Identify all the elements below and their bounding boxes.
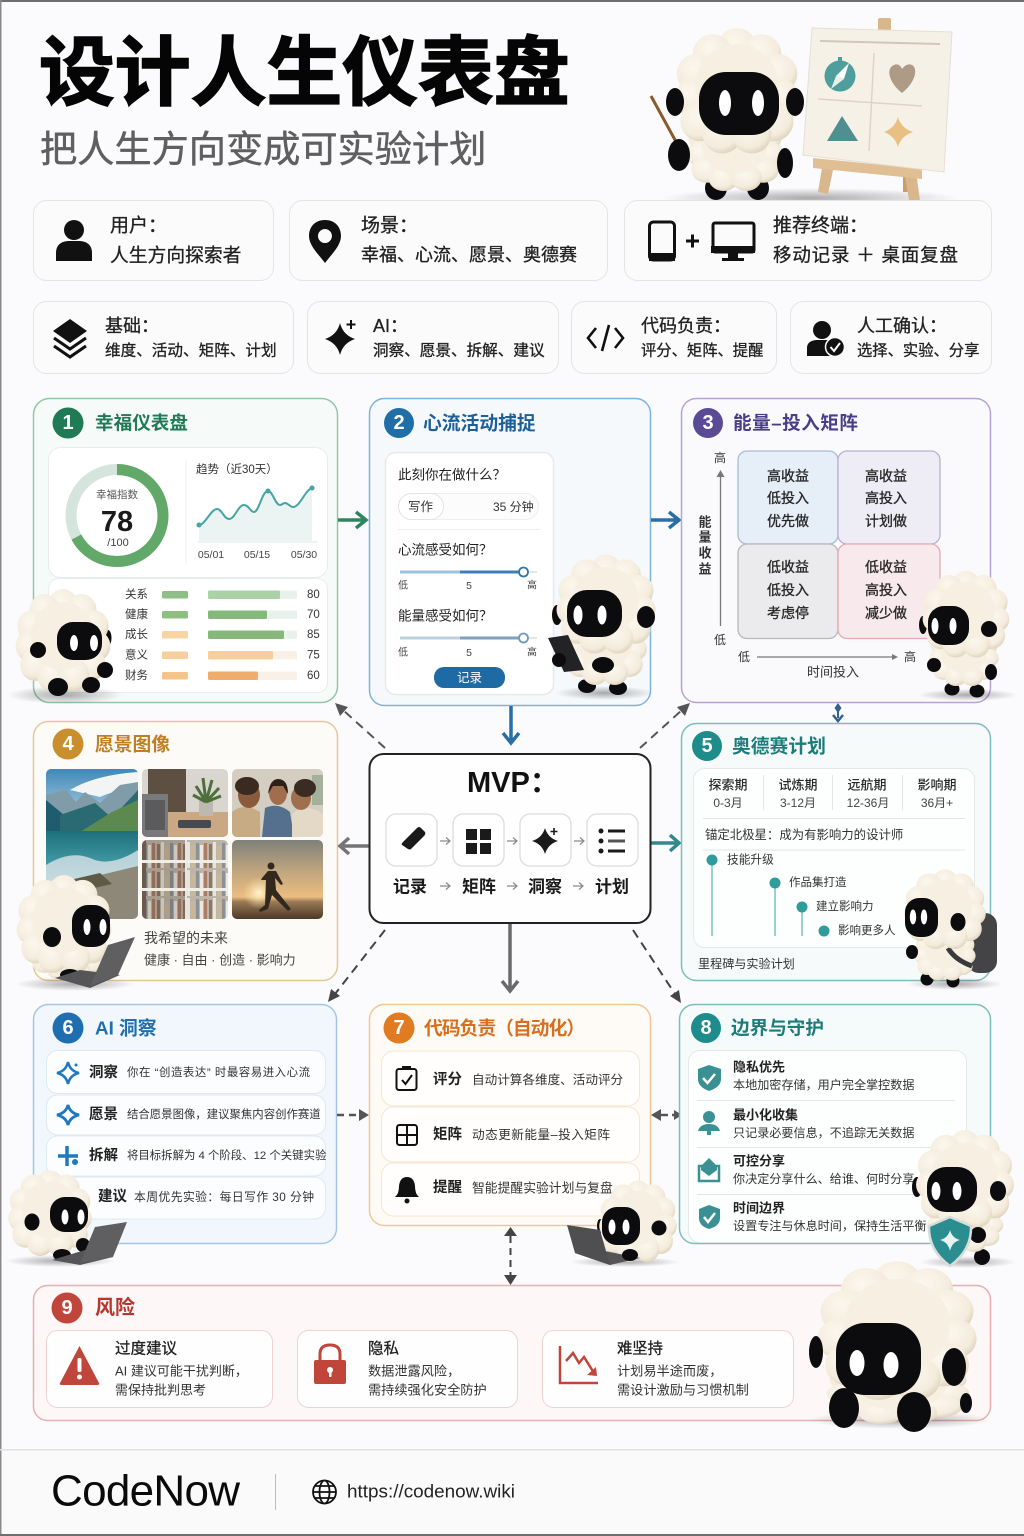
- risk: hard to persist: 计划易半途而废，: [617, 1362, 722, 1378]
- bar chart: life dimensions: 70: [307, 609, 320, 621]
- step: record: [386, 814, 437, 896]
- badge 4: [52, 728, 84, 760]
- risk: privacy: 需持续强化安全防护: [368, 1382, 487, 1398]
- heading 5: 奥德赛计划: [732, 734, 826, 756]
- badge 6: 6: [62, 1017, 74, 1039]
- photo: bookshelves: [142, 840, 228, 919]
- card: code: 评分、矩阵、提醒: [641, 342, 763, 360]
- quadrant: high gain low input: 优先做: [767, 513, 809, 529]
- icon: location pin: [309, 220, 341, 263]
- timeline caption: 里程碑与实验计划: [698, 956, 795, 971]
- logo: CodeNow: CodeNow: [51, 1466, 240, 1516]
- card: user: [34, 200, 274, 280]
- heading 2: 心流活动捕捉: [423, 412, 536, 434]
- photo: desk and plant: [142, 769, 228, 837]
- heading 3: 能量–投入矩阵: [733, 412, 858, 434]
- axes: 时间投入: [807, 664, 859, 680]
- card: user: 人生方向探索者: [110, 244, 241, 266]
- form card: 高: [527, 578, 537, 592]
- bar chart: life dimensions: 关系: [125, 587, 148, 601]
- form card: 能量感受如何？: [398, 608, 492, 624]
- quadrant: high gain high input: 高投入: [865, 490, 907, 506]
- line chart: trend: 趋势（近30天）: [196, 463, 278, 476]
- insight row: 洞察: [89, 1063, 118, 1081]
- minimal collection: 最小化收集: [733, 1108, 798, 1122]
- suggestion row: 本周优先实验：每日写作 30 分钟: [134, 1190, 314, 1204]
- form card: 写作: [408, 500, 434, 514]
- badge 3: [693, 408, 723, 438]
- privacy first: 隐私优先: [733, 1060, 785, 1074]
- form card: 5: [466, 647, 472, 659]
- quadrant: low gain high input: [838, 544, 940, 638]
- heading 6: AI 洞察: [95, 1018, 157, 1038]
- quadrant: high gain high input: 高收益: [865, 468, 907, 484]
- milestone timeline: 建立影响力: [816, 899, 874, 913]
- arrow: dashed to panel 6: [328, 930, 385, 1002]
- arrow: panel 2 to panel 3: [651, 512, 679, 528]
- axes: 低: [738, 650, 750, 664]
- axes: 高: [904, 649, 916, 664]
- icon: lock: [314, 1345, 346, 1384]
- milestone timeline: 作品集打造: [789, 875, 847, 889]
- phases: 远航期: [847, 778, 887, 792]
- breakdown row: [46, 1136, 327, 1176]
- panel 8: boundaries: [680, 1004, 1016, 1268]
- risk: over-advice: 过度建议: [115, 1340, 178, 1358]
- axes: 收: [698, 546, 712, 560]
- badge 1: [52, 408, 84, 438]
- quadrant: high gain low input: 低投入: [767, 490, 809, 506]
- line chart: trend: 05/30: [291, 549, 317, 561]
- phases: 试炼期: [778, 778, 818, 792]
- card: code: [572, 302, 776, 374]
- controlled sharing: 你决定分享什么、给谁、何时分享: [733, 1171, 914, 1186]
- privacy first: [698, 1060, 914, 1092]
- mascot with backpack: [904, 869, 1003, 990]
- illustration: sheep mascot with easel board: [651, 18, 960, 208]
- badge 2: [384, 408, 414, 438]
- step: plan: 计划: [595, 878, 629, 896]
- card: devices: 推荐终端：: [773, 214, 868, 236]
- risk: privacy: 隐私: [368, 1340, 399, 1358]
- risk: hard to persist: 需设计激励与习惯机制: [617, 1382, 749, 1398]
- form card: 心流感受如何？: [398, 542, 492, 558]
- title: 设计人生仪表盘: [39, 31, 570, 116]
- arrow: dashed to panel 8: [633, 930, 681, 1003]
- mascot with laptop: [567, 1180, 680, 1267]
- form card: [386, 452, 554, 694]
- line chart: trend: [196, 463, 318, 561]
- scoring row: 自动计算各维度、活动评分: [472, 1072, 624, 1087]
- badge 6: [52, 1012, 84, 1044]
- arrow: dashed to panel 1: [335, 703, 385, 748]
- milestone timeline: [706, 852, 896, 937]
- icon: sparkle: [325, 320, 356, 355]
- photo: three people: [232, 769, 323, 837]
- risk: hard to persist: [542, 1330, 794, 1408]
- subtitle: 把人生方向变成可实验计划: [40, 128, 486, 170]
- card: user: 用户：: [110, 214, 167, 236]
- icon: globe: [313, 1480, 336, 1504]
- badge 5: [692, 731, 722, 761]
- vision row: [46, 1095, 326, 1135]
- axes: 低: [714, 633, 726, 647]
- badge 7: 7: [393, 1017, 405, 1039]
- risk: privacy: [298, 1330, 518, 1408]
- url: https://codenow.wiki: [347, 1482, 515, 1502]
- axes: 能: [698, 514, 712, 530]
- caption: [144, 930, 296, 968]
- axes: [698, 450, 916, 680]
- mascot sitting: [7, 589, 123, 704]
- arrow: MVP to panel 5: [651, 835, 679, 851]
- time boundary: [699, 1200, 927, 1233]
- vision row: 愿景: [89, 1106, 118, 1123]
- panel: MVP: [370, 754, 650, 923]
- large mascot: [808, 1261, 992, 1432]
- insight row: 你在 “创造表达” 时最容易进入心流: [127, 1065, 310, 1079]
- badge 3: 3: [702, 412, 714, 434]
- step: record: 记录: [393, 878, 427, 896]
- mascot standing: [918, 571, 1018, 701]
- insight row: [46, 1050, 326, 1094]
- donut chart: happiness index 78: 幸福指数: [96, 488, 138, 501]
- donut chart: happiness index 78: 78: [101, 506, 133, 538]
- quadrant: high gain high input: [838, 451, 940, 544]
- phases: [708, 775, 957, 810]
- phases: 0-3月: [713, 796, 743, 810]
- card: code: 代码负责：: [641, 316, 731, 336]
- scoring row: [382, 1051, 640, 1106]
- milestone timeline: 影响更多人: [838, 923, 896, 937]
- caption: 我希望的未来: [144, 930, 228, 946]
- form card: 低: [398, 646, 408, 658]
- bar chart: life dimensions: 75: [307, 650, 320, 662]
- reminder row: [382, 1163, 640, 1216]
- milestone timeline: 技能升级: [727, 852, 774, 866]
- donut chart: happiness index 78: [71, 470, 163, 562]
- phases: 影响期: [917, 778, 957, 792]
- quadrant: low gain high input: 低收益: [865, 559, 907, 575]
- risk: privacy: 数据泄露风险，: [368, 1364, 460, 1378]
- risk: hard to persist: 难坚持: [617, 1340, 663, 1358]
- footer divider: [0, 1449, 1024, 1450]
- arrow: panel 6 to panel 7: [337, 1109, 369, 1121]
- panel 9: risks: [34, 1261, 992, 1432]
- suggestion row: [46, 1177, 326, 1219]
- card: devices: [624, 200, 992, 280]
- card: human confirm: 选择、实验、分享: [857, 342, 979, 360]
- bar chart: life dimensions: 财务: [125, 668, 148, 682]
- minimal collection: 只记录必要信息，不追踪无关数据: [733, 1125, 914, 1140]
- bar chart: life dimensions: [125, 587, 320, 682]
- panel 5: Odyssey plan: [682, 724, 1003, 990]
- panel 7: code responsibilities: [370, 1004, 680, 1267]
- panel 3: energy-input matrix: [682, 398, 1018, 702]
- flow arrows: [440, 838, 584, 890]
- icon: phone plus desktop: [649, 222, 755, 261]
- photo: mountain lake: [46, 769, 138, 919]
- time boundary: 时间边界: [733, 1200, 785, 1216]
- phases: 探索期: [708, 778, 748, 792]
- arrow: panel 7 and panel 9 link: [504, 1227, 517, 1285]
- mascot with laptop: [5, 1170, 127, 1267]
- bar chart: life dimensions: 意义: [125, 648, 148, 662]
- north star: 锚定北极星：成为有影响力的设计师: [705, 827, 903, 842]
- quadrant: low gain low input: 低收益: [767, 559, 809, 575]
- step: insight: 洞察: [528, 876, 562, 896]
- phases: 36月+: [921, 796, 953, 810]
- card: AI: AI：: [373, 316, 408, 336]
- phases: 3-12月: [780, 796, 816, 810]
- mascot with laptop: [15, 875, 135, 991]
- icon: layers: [53, 319, 87, 357]
- line chart: trend: 05/15: [244, 549, 270, 561]
- card: foundation: [34, 302, 294, 374]
- step: insight: [520, 814, 571, 896]
- card: scene: [290, 200, 608, 280]
- form card: 5: [466, 580, 472, 592]
- badge 8: 8: [700, 1017, 712, 1039]
- badge 5: 5: [701, 735, 713, 757]
- quadrant: high gain low input: [738, 451, 838, 544]
- icon: person check: [807, 321, 844, 356]
- heading 1: 幸福仪表盘: [95, 412, 188, 434]
- arrow: MVP to panel 7: [502, 924, 518, 991]
- icon: code brackets: [588, 325, 623, 351]
- reminder row: 智能提醒实验计划与复盘: [472, 1180, 613, 1196]
- card: AI: 洞察、愿景、拆解、建议: [373, 342, 545, 360]
- quadrant: low gain low input: 低投入: [767, 582, 809, 598]
- phases: 12-36月: [847, 796, 889, 810]
- quadrant: low gain low input: [738, 544, 838, 638]
- arrow: panel 7 and panel 8 link: [651, 1109, 682, 1121]
- step: matrix: [453, 814, 504, 896]
- panel 1: happiness dashboard: [7, 398, 338, 704]
- caption: 健康 · 自由 · 创造 · 影响力: [144, 952, 296, 968]
- scoring row: 评分: [433, 1071, 462, 1088]
- quadrant: low gain high input: 高投入: [865, 582, 907, 598]
- bar chart: life dimensions: 成长: [125, 628, 148, 641]
- panel 2: flow capture: [370, 398, 655, 706]
- badge 9: 9: [61, 1297, 73, 1319]
- card: scene: 幸福、心流、愿景、奥德赛: [361, 245, 577, 265]
- heading 9: 风险: [95, 1295, 135, 1319]
- donut chart: happiness index 78: /100: [107, 537, 129, 549]
- suggestion row: 建议: [98, 1187, 127, 1205]
- badge 8: [691, 1013, 721, 1043]
- card: scene: 场景：: [361, 214, 418, 236]
- axes: 益: [698, 562, 712, 576]
- form card: 高: [527, 646, 537, 658]
- quadrant: high gain high input: 计划做: [865, 513, 907, 529]
- photo: runner at sunset: [232, 840, 323, 919]
- card: human confirm: 人工确认：: [857, 316, 947, 336]
- badge 1: 1: [62, 412, 74, 434]
- quadrant: low gain high input: 减少做: [865, 605, 907, 621]
- arrow: dashed to panel 3: [640, 703, 690, 748]
- badge 4: 4: [62, 733, 74, 755]
- privacy first: 本地加密存储，用户完全掌控数据: [733, 1077, 914, 1092]
- card: AI: [308, 302, 558, 374]
- badge 2: 2: [393, 412, 405, 434]
- quadrant: low gain low input: 考虑停: [767, 605, 809, 621]
- form card: 记录: [457, 671, 482, 685]
- mascot with tablet: [548, 555, 655, 700]
- arrow: MVP to panel 4: [340, 838, 369, 854]
- icon: person: [56, 220, 92, 261]
- panel 6: AI insight: [5, 1004, 336, 1267]
- heading 7: 代码负责（自动化）: [424, 1018, 585, 1038]
- quadrant: high gain low input: 高收益: [767, 468, 809, 484]
- arrow: panel 2 to MVP: [503, 706, 519, 743]
- mascot with shield: [912, 1130, 1016, 1268]
- arrow: panel 1 to panel 2: [338, 512, 366, 528]
- icon: warning: [60, 1346, 99, 1385]
- card: devices: 移动记录 ＋ 桌面复盘: [773, 244, 958, 266]
- bar chart: life dimensions: 85: [307, 629, 320, 641]
- bar chart: life dimensions: 80: [307, 589, 320, 601]
- minimal collection: [698, 1108, 914, 1140]
- form card: 低: [398, 578, 408, 592]
- axes: 量: [698, 530, 712, 544]
- icon: declining chart: [560, 1346, 598, 1383]
- bar chart: life dimensions: 60: [307, 670, 320, 682]
- risk: over-advice: [46, 1330, 272, 1408]
- breakdown row: 将目标拆解为 4 个阶段、12 个关键实验: [127, 1148, 327, 1162]
- reminder row: 提醒: [433, 1179, 462, 1196]
- vision row: 结合愿景图像，建议聚焦内容创作赛道: [127, 1107, 321, 1121]
- time boundary: 设置专注与休息时间，保持生活平衡: [733, 1218, 927, 1233]
- card: foundation: 维度、活动、矩阵、计划: [105, 342, 277, 360]
- line chart: trend: 05/01: [198, 549, 224, 561]
- heading 4: 愿景图像: [95, 734, 170, 754]
- panel 4: vision images: [15, 722, 338, 991]
- matrix row: 矩阵: [433, 1126, 462, 1143]
- badge 9: [52, 1292, 82, 1324]
- form card: 此刻你在做什么？: [398, 468, 506, 482]
- controlled sharing: [699, 1154, 914, 1186]
- matrix row: [382, 1107, 640, 1162]
- form card: 35 分钟: [493, 499, 534, 514]
- badge 7: [384, 1012, 414, 1044]
- heading 8: 边界与守护: [731, 1018, 824, 1038]
- controlled sharing: 可控分享: [733, 1154, 785, 1168]
- bar chart: life dimensions: 健康: [125, 607, 148, 621]
- card: human confirm: [790, 302, 992, 374]
- breakdown row: 拆解: [89, 1147, 118, 1164]
- MVP heading: MVP：: [467, 767, 559, 799]
- step: matrix: 矩阵: [462, 878, 496, 896]
- matrix row: 动态更新能量–投入矩阵: [472, 1127, 610, 1142]
- arrow: panel 3 and panel 5 link: [833, 703, 843, 721]
- axes: 高: [714, 450, 726, 465]
- risk: over-advice: AI 建议可能干扰判断，: [115, 1364, 248, 1378]
- step: plan: [587, 814, 638, 896]
- card: foundation: 基础：: [105, 316, 159, 336]
- risk: over-advice: 需保持批判思考: [115, 1382, 206, 1398]
